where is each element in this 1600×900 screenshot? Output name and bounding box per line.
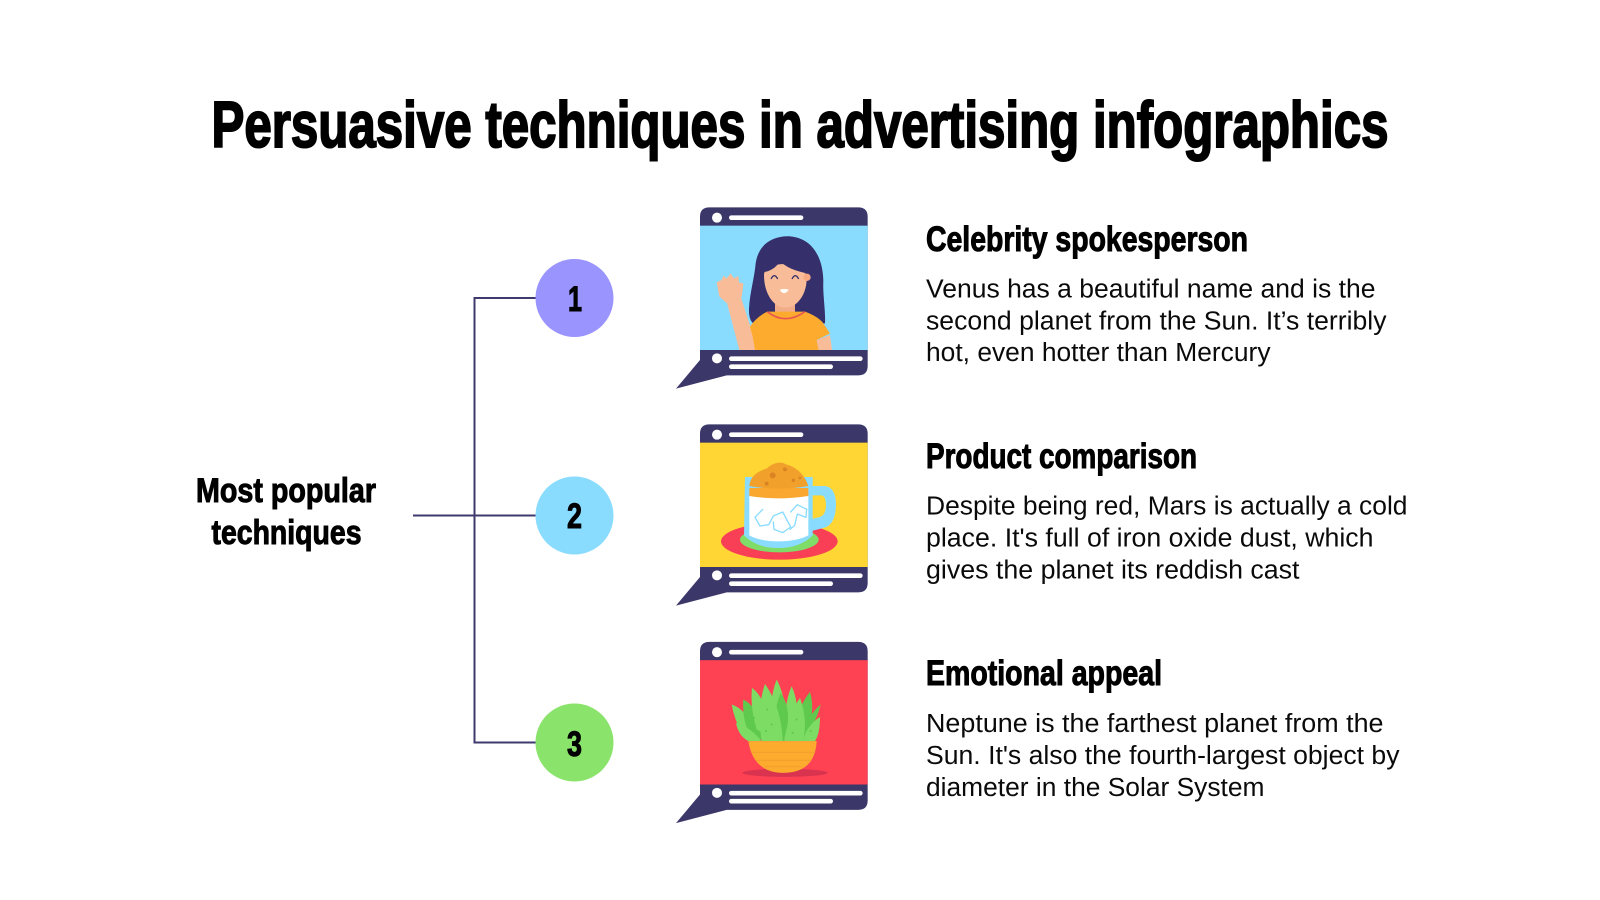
text block: celebrity spokesperson: hot, even hotter than Mercury [926, 339, 1271, 367]
text block: emotional appeal [926, 654, 1400, 802]
text block: celebrity spokesperson: Celebrity spokesperson [926, 220, 1248, 259]
root label: most popular techniques [196, 472, 376, 552]
icon: social post with coffee cup [676, 424, 868, 606]
text block: celebrity spokesperson: Venus has a beautiful name and is the [926, 276, 1376, 304]
text block: celebrity spokesperson [926, 220, 1387, 367]
number badge 1 [536, 259, 614, 337]
connector tree [413, 298, 536, 742]
text block: emotional appeal: Sun. It's also the fourth-largest object by [926, 742, 1400, 770]
text block: celebrity spokesperson: second planet from the Sun. It’s terribly [926, 308, 1387, 336]
number badge 3: 3 [567, 725, 582, 764]
icon: social post with potted plant [676, 642, 868, 823]
number badge 2: 2 [567, 497, 582, 536]
text block: product comparison: gives the planet its reddish cast [926, 556, 1300, 584]
text block: product comparison [926, 437, 1408, 584]
text block: emotional appeal: diameter in the Solar System [926, 774, 1264, 802]
root label: most popular techniques: Most popular [196, 472, 376, 510]
text block: emotional appeal: Neptune is the farthest planet from the [926, 710, 1384, 738]
text block: product comparison: Despite being red, Mars is actually a cold [926, 492, 1408, 520]
text block: product comparison: place. It's full of iron oxide dust, which [926, 524, 1374, 552]
text block: emotional appeal: Emotional appeal [926, 654, 1162, 693]
icon: social post with celebrity [676, 207, 868, 389]
root label: most popular techniques: techniques [212, 514, 362, 552]
number badge 3 [536, 704, 614, 782]
text block: product comparison: Product comparison [926, 437, 1197, 476]
number badge 2 [536, 476, 614, 554]
number badge 1: 1 [568, 280, 582, 319]
